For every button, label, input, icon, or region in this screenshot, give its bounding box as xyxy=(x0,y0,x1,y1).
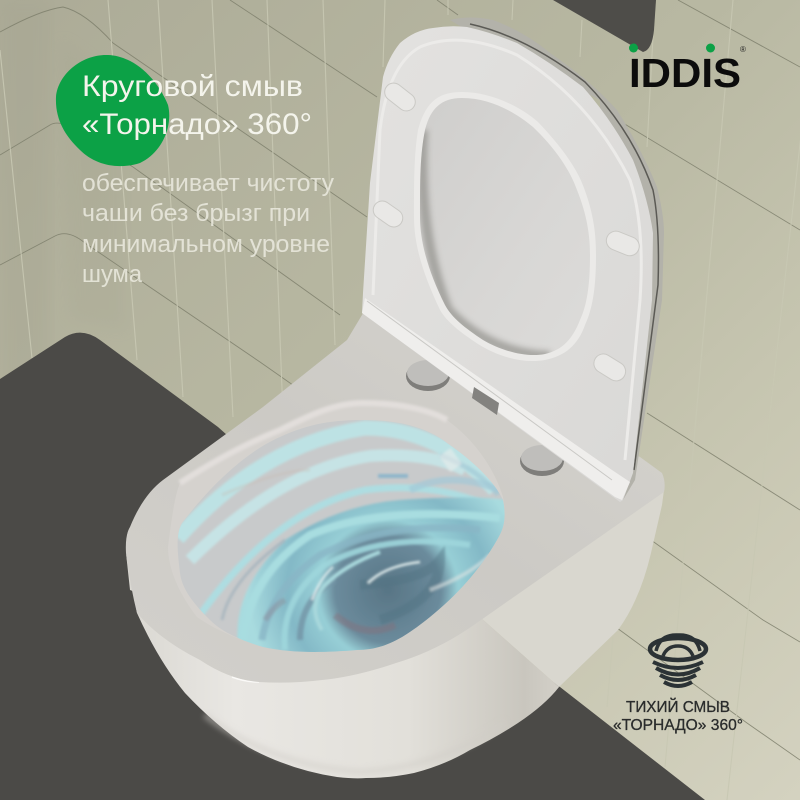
dark shelf xyxy=(0,333,705,800)
hinge left xyxy=(406,360,450,391)
label: quiet flush xyxy=(613,698,743,734)
title: «Торнадо» 360° xyxy=(82,108,312,141)
label: quiet flush: ТИХИЙ СМЫВ xyxy=(626,698,730,716)
water swirl xyxy=(178,420,505,652)
lid bumpers xyxy=(370,79,642,384)
lid back edge xyxy=(450,18,664,500)
logo: IDDIS: IDDIS xyxy=(629,50,741,96)
description text: минимальном уровне xyxy=(82,231,330,258)
toilet rear side xyxy=(481,490,664,687)
title xyxy=(82,70,312,141)
toilet lid xyxy=(362,18,664,502)
bowl opening xyxy=(168,403,505,652)
label: quiet flush: «ТОРНАДО» 360° xyxy=(613,717,743,734)
description text xyxy=(82,170,334,288)
green blob xyxy=(56,55,169,166)
icon: tornado flush xyxy=(650,635,706,686)
seat hole xyxy=(414,92,596,361)
toilet xyxy=(126,310,665,778)
toilet rim surface xyxy=(126,310,665,683)
description text: шума xyxy=(82,261,143,288)
flush plate xyxy=(553,0,656,52)
title: Круговой смыв xyxy=(82,70,303,103)
logo: IDDIS: ® xyxy=(740,45,746,54)
lid front xyxy=(362,26,653,502)
hinge strip xyxy=(362,298,630,500)
toilet bowl body xyxy=(126,553,559,778)
hinge right xyxy=(520,445,564,476)
centre hinge xyxy=(472,387,499,415)
description text: чаши без брызг при xyxy=(82,200,310,227)
vortex xyxy=(237,498,510,660)
description text: обеспечивает чистоту xyxy=(82,170,334,197)
